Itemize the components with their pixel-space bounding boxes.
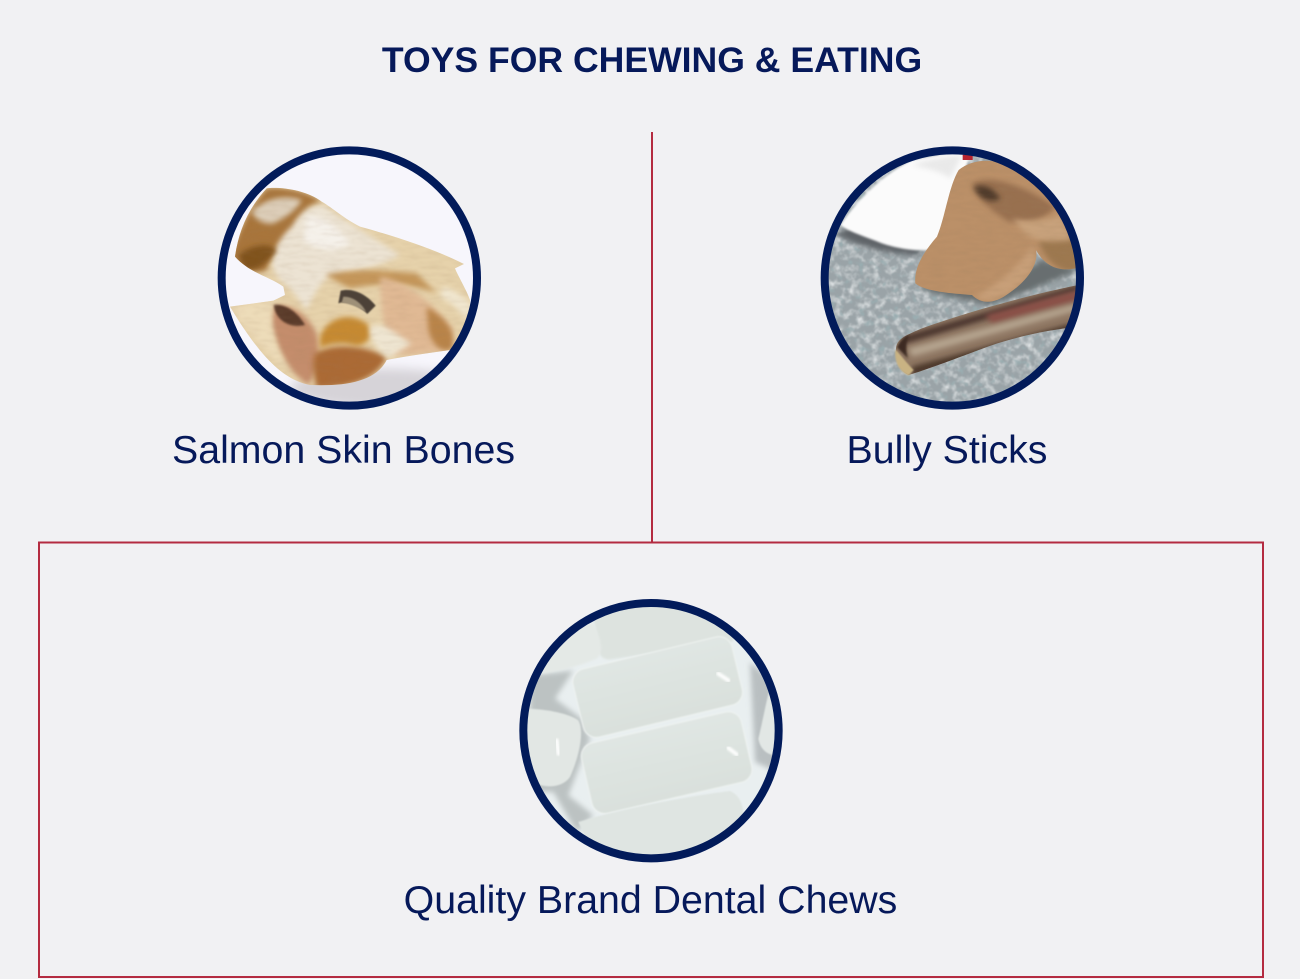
label: Quality Brand Dental Chews: Quality Brand Dental Chews bbox=[404, 878, 897, 922]
icon: dental chews photo bbox=[520, 583, 783, 865]
label: Salmon Skin Bones: Salmon Skin Bones bbox=[172, 428, 515, 472]
title: TOYS FOR CHEWING & EATING bbox=[382, 40, 922, 80]
label: Bully Sticks: Bully Sticks bbox=[847, 428, 1047, 472]
icon: salmon skin bone photo bbox=[220, 150, 480, 410]
panel frame: dental chews bbox=[39, 542, 1263, 977]
vertical divider bbox=[651, 132, 653, 542]
icon: bully stick photo bbox=[822, 150, 1085, 413]
